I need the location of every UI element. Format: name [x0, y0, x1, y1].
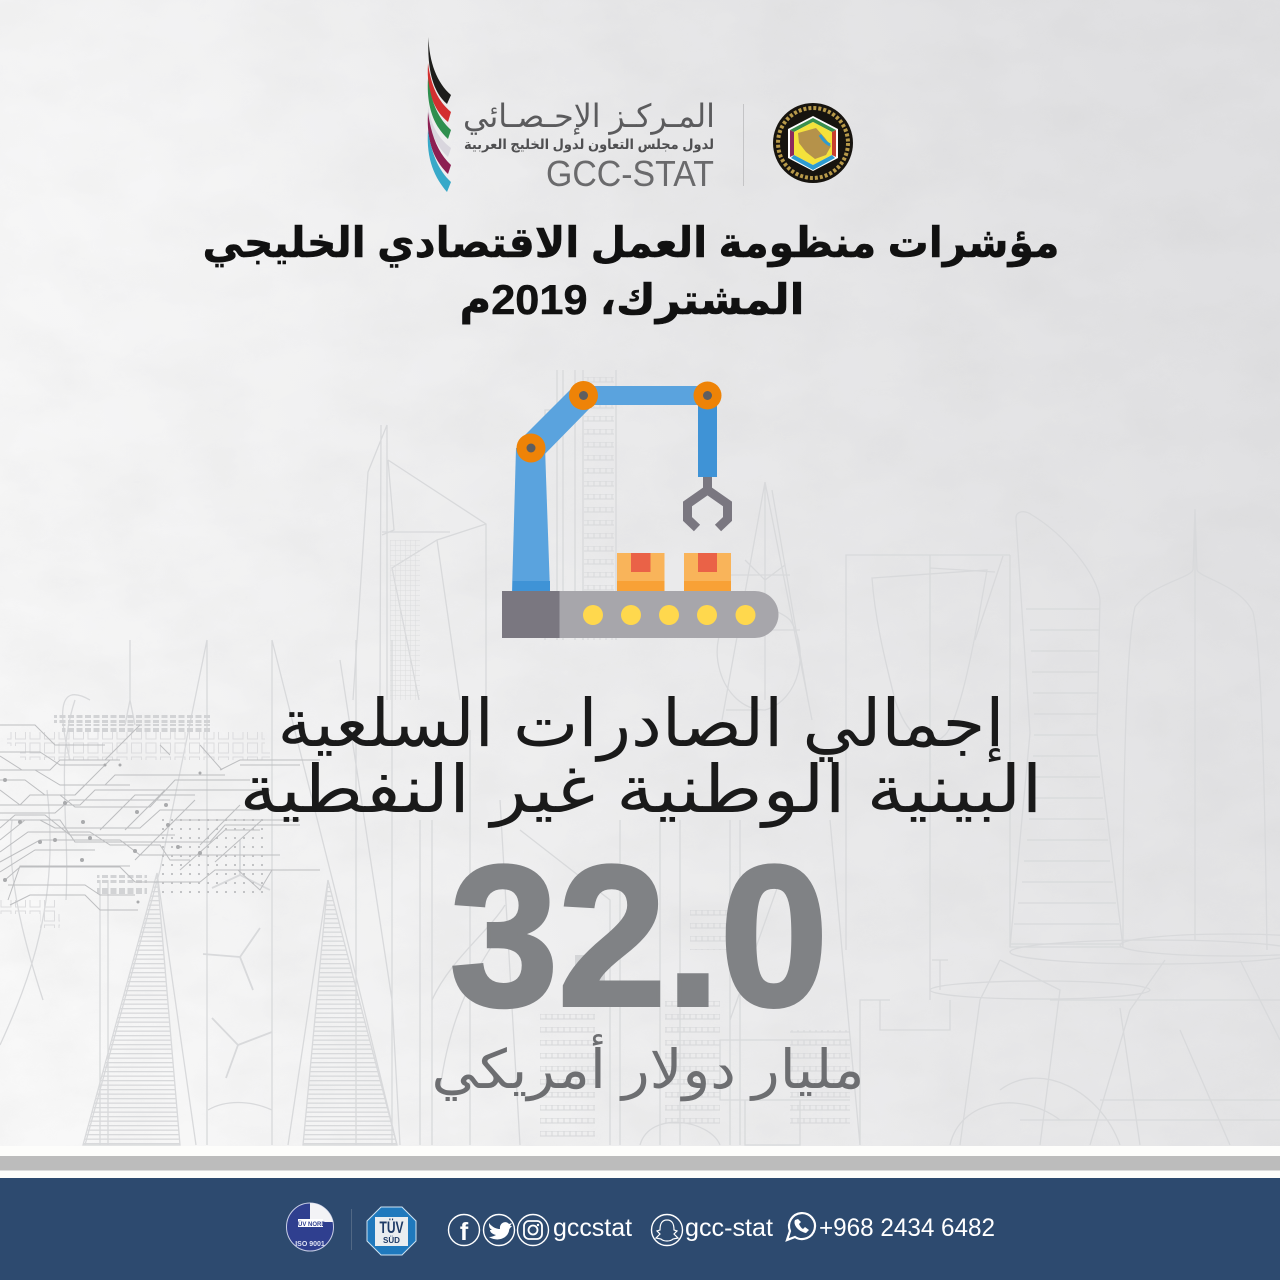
logo: GCC-STAT	[428, 37, 744, 194]
boats and low structures	[860, 934, 1280, 1145]
tower: rounded blade	[1010, 512, 1123, 947]
phone number: +968 2434 6482	[819, 1214, 995, 1242]
badge: TUV SUD: SÜD	[383, 1236, 400, 1245]
icon: snapchat	[652, 1214, 682, 1246]
footer bar	[0, 1178, 1280, 1280]
icon: whatsapp	[787, 1213, 815, 1240]
logo ribbon	[428, 37, 451, 192]
tower: lattice pyramid	[717, 482, 812, 720]
icon: facebook	[448, 1214, 480, 1246]
heading: indicator name	[240, 686, 1042, 828]
icon: twitter	[484, 1214, 514, 1246]
icon: instagram	[518, 1214, 548, 1246]
title	[202, 219, 1060, 325]
badge: TUV Nord ISO 9001	[286, 1203, 334, 1251]
big number: 32.0	[450, 825, 828, 1048]
title line 2: المشترك، 2019م	[460, 276, 804, 325]
skyline line drawing	[0, 370, 1280, 1145]
logo Arabic name: المـركـز الإحـصـائي	[463, 98, 715, 135]
handle: gcc-stat: gcc-stat	[685, 1214, 773, 1242]
wind turbines	[203, 840, 272, 1078]
logo Arabic subtitle: لدول مجلس التعاون لدول الخليج العربية	[464, 136, 714, 153]
badge: TUV Nord ISO 9001: ISO 9001	[295, 1241, 325, 1248]
divider band	[0, 1146, 1280, 1178]
badge: TUV SUD	[367, 1207, 416, 1255]
icon: facebook: f	[460, 1218, 469, 1246]
badge: TUV SUD: TÜV	[380, 1218, 404, 1237]
handle: gccstat: gccstat	[553, 1214, 632, 1242]
badge: TUV Nord ISO 9001: TÜV NORD	[294, 1221, 326, 1228]
tower: ladder behind robot	[545, 370, 616, 640]
tower: cut-corner left of arm	[353, 425, 486, 700]
tower: frame with sail	[846, 555, 1010, 1000]
twin sail towers	[83, 873, 397, 1145]
logo Latin name: GCC-STAT	[546, 153, 714, 194]
tall spires left	[0, 640, 520, 1145]
heading line 2: البينية الوطنية غير النفطية	[240, 752, 1042, 828]
GCC seal	[773, 103, 853, 183]
central building stacks	[420, 820, 860, 1145]
circuit board pattern	[0, 715, 320, 928]
title line 1: مؤشرات منظومة العمل الاقتصادي الخليجي	[202, 219, 1060, 268]
heading line 1: إجمالي الصادرات السلعية	[278, 686, 1004, 763]
icon: robotic arm on conveyor	[502, 381, 778, 638]
tower: spire dome	[1123, 509, 1267, 950]
unit label: مليار دولار أمريكي	[432, 1034, 864, 1101]
